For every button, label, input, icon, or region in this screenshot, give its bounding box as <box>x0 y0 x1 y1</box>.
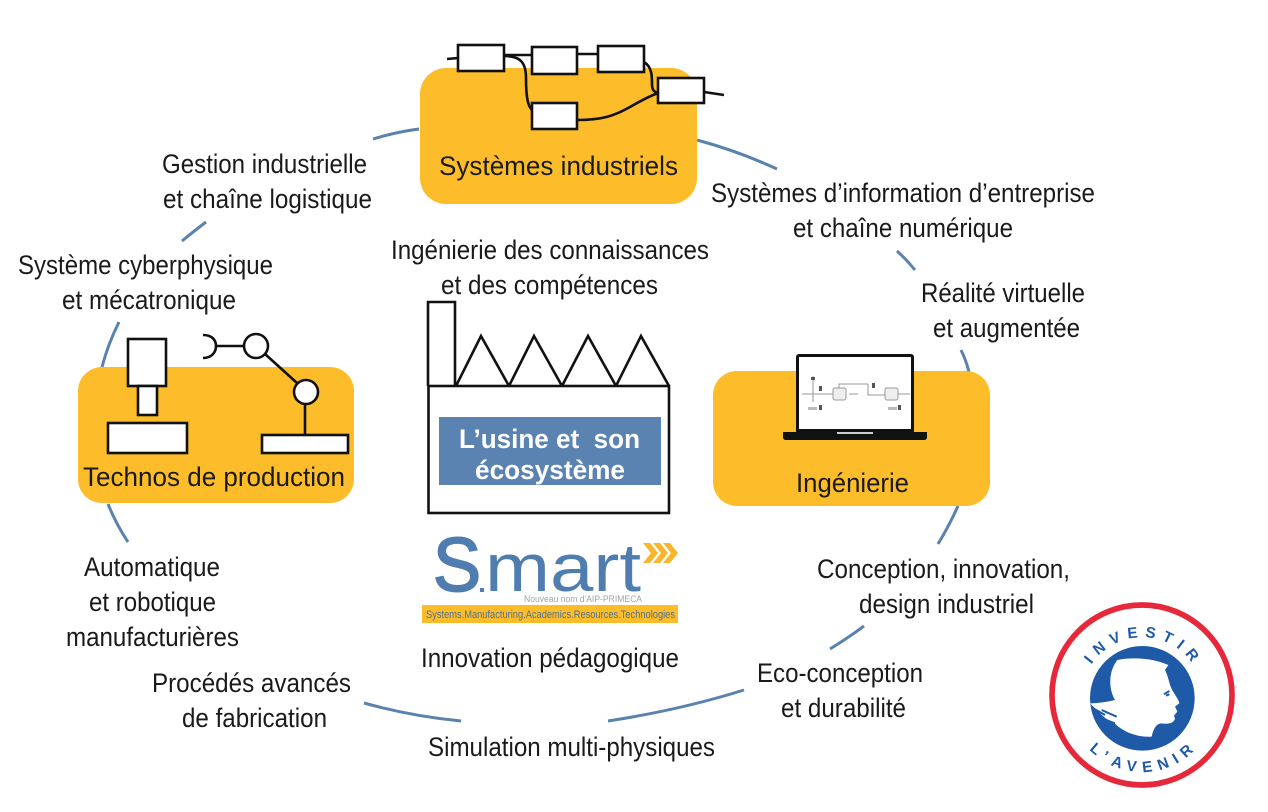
logo: S.mart: mart <box>485 530 641 606</box>
logo: S.mart <box>422 523 678 623</box>
logo: S.mart: S <box>433 523 481 608</box>
label: Innovation pédagogique: Innovation pédagogique <box>421 643 679 673</box>
panel background <box>713 371 990 506</box>
label: Ingénierie des connaissances: Ingénierie des connaissances <box>391 235 709 265</box>
icon: factory <box>428 302 669 513</box>
panel background <box>420 68 697 204</box>
icon: laptop with schematic <box>783 354 927 440</box>
logo: Investir l'Avenir: L’AVENIR <box>1090 742 1194 772</box>
label: Procédés avancés: Procédés avancés <box>152 668 351 698</box>
factory title box: écosystème <box>475 455 625 485</box>
panel: Technos de production <box>78 334 354 503</box>
label: Gestion industrielle: Gestion industrielle <box>162 149 367 179</box>
label: Systèmes d'information: Systèmes d’information d’entreprise <box>711 178 1095 208</box>
label: chaîne logistique: et chaîne logistique <box>163 184 372 214</box>
label: Eco-conception: Eco-conception <box>757 658 923 688</box>
label: et mécatronique: et mécatronique <box>62 285 236 315</box>
label: Simulation multi-physiques: Simulation multi-physiques <box>428 732 715 762</box>
logo: S.mart: Systems.Manufacturing.Academics.Resources.Technologies <box>426 609 675 621</box>
label: design industriel: design industriel <box>859 589 1034 619</box>
panel: Systèmes industriels <box>420 45 724 204</box>
icon: machine tool <box>108 339 187 453</box>
panel label: Technos de production <box>83 462 345 492</box>
label: et durabilité: et durabilité <box>781 693 906 723</box>
logo: Investir l'Avenir: INVESTIR <box>1084 627 1198 664</box>
label: manufacturières: manufacturières <box>66 622 239 652</box>
label: chaîne numérique: et chaîne numérique <box>793 213 1013 243</box>
logo: S.mart: Nouveau nom d'AIP-PRIMECA <box>524 594 643 605</box>
icon: robot arm <box>203 334 348 453</box>
label: et augmentée: et augmentée <box>933 313 1080 343</box>
factory title box <box>439 417 661 485</box>
label: Automatique: Automatique <box>84 552 220 582</box>
icon: process flow diagram <box>447 45 724 129</box>
label: et des compétences: et des compétences <box>441 270 658 300</box>
logo: Investir l'Avenir <box>1049 602 1235 788</box>
label: et robotique: et robotique <box>89 587 216 617</box>
connecting ring arcs <box>102 129 969 721</box>
label: Réalité virtuelle: Réalité virtuelle <box>921 278 1085 308</box>
panel label: Ingénierie <box>796 468 909 498</box>
panel label: Systèmes industriels <box>439 151 678 181</box>
panel background <box>78 367 354 503</box>
label: Conception, innovation: Conception, innovation, <box>817 554 1070 584</box>
label: de fabrication: de fabrication <box>182 703 327 733</box>
label: Système cyberphysique: Système cyberphysique <box>18 250 273 280</box>
factory title box: L’usine et son <box>459 424 640 454</box>
panel: Ingénierie <box>713 354 990 506</box>
